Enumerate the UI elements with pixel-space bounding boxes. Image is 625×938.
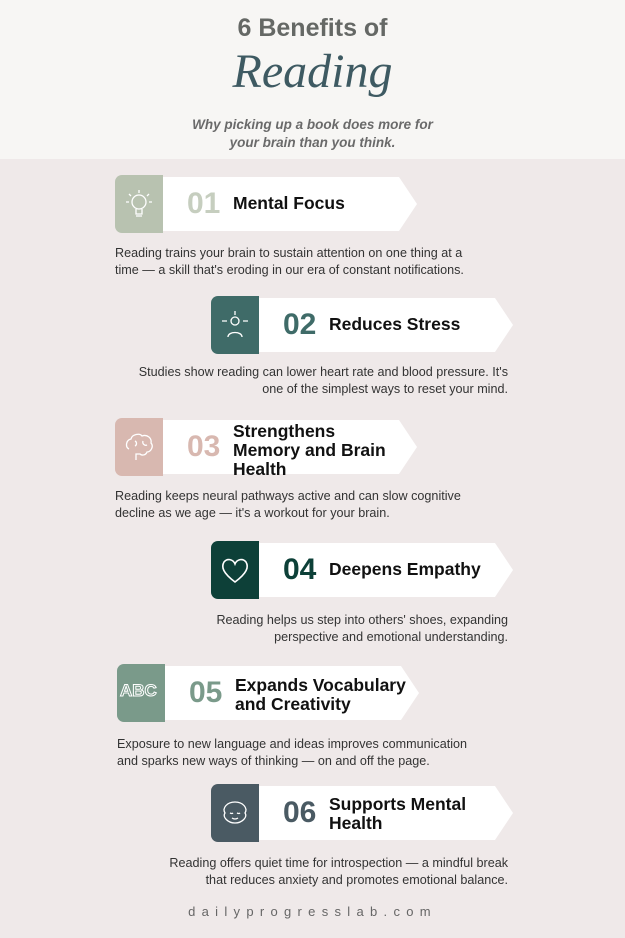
card 01 <box>115 175 417 233</box>
heading: Expands Vocabulary <box>235 675 406 695</box>
icon: calm face <box>211 784 259 842</box>
heading: Mental Focus <box>233 193 345 213</box>
description 05: Exposure to new language and ideas improves communication <box>117 737 467 751</box>
card 06 <box>211 784 513 842</box>
description 05: and sparks new ways of thinking — on and off the page. <box>117 754 430 768</box>
description 01: time — a skill that's eroding in our era of constant notifications. <box>115 262 464 276</box>
header panel <box>0 0 625 159</box>
icon: lightbulb <box>115 175 163 233</box>
card 03: 03 <box>187 430 220 463</box>
card 03 <box>115 418 417 479</box>
icon: ABC: ABC <box>120 681 157 700</box>
subtitle <box>192 117 434 150</box>
description 01: Reading trains your brain to sustain attention on one thing at a <box>115 246 462 260</box>
description 04: Reading helps us step into others' shoes, expanding <box>216 613 508 627</box>
description 01 <box>115 246 464 276</box>
heading: Strengthens <box>233 421 335 441</box>
heading <box>233 421 386 479</box>
script title: Reading <box>233 45 392 98</box>
description 03 <box>115 489 461 520</box>
description 04: perspective and emotional understanding. <box>274 630 508 644</box>
description 03: decline as we age — it's a workout for your brain. <box>115 506 390 520</box>
description 02: one of the simplest ways to reset your mind. <box>262 382 508 396</box>
heading: and Creativity <box>235 694 351 714</box>
description 06 <box>169 856 508 886</box>
card 05 <box>117 664 419 722</box>
heading <box>329 794 466 833</box>
card 02: 02 <box>283 308 316 341</box>
description 06: Reading offers quiet time for introspection — a mindful break <box>169 856 508 870</box>
description 04 <box>216 613 508 644</box>
footer url: dailyprogresslab.com <box>188 904 437 919</box>
heading: Health <box>329 813 382 833</box>
heading: Memory and Brain <box>233 440 386 460</box>
heading: Deepens Empathy <box>329 559 481 579</box>
card 01: 01 <box>187 187 220 220</box>
title: 6 Benefits of <box>237 14 388 42</box>
subtitle: Why picking up a book does more for <box>192 117 433 132</box>
card 04: 04 <box>283 553 316 586</box>
icon: heart <box>211 541 259 599</box>
card 02 <box>211 296 513 354</box>
description 02: Studies show reading can lower heart rate and blood pressure. It's <box>139 365 508 379</box>
description 06: that reduces anxiety and promotes emotional balance. <box>206 872 508 886</box>
description 05 <box>117 737 467 768</box>
heading: Supports Mental <box>329 794 466 814</box>
card 04 <box>211 541 513 599</box>
description 03: Reading keeps neural pathways active and can slow cognitive <box>115 489 461 503</box>
subtitle: your brain than you think. <box>230 135 395 150</box>
heading: Reduces Stress <box>329 314 460 334</box>
icon: stress <box>211 296 259 354</box>
description 02 <box>139 365 508 396</box>
heading: Health <box>233 459 286 479</box>
heading <box>235 675 406 714</box>
card 06: 06 <box>283 796 316 829</box>
icon: brain <box>115 418 163 476</box>
icon: ABC <box>117 664 165 722</box>
card 05: 05 <box>189 676 222 709</box>
